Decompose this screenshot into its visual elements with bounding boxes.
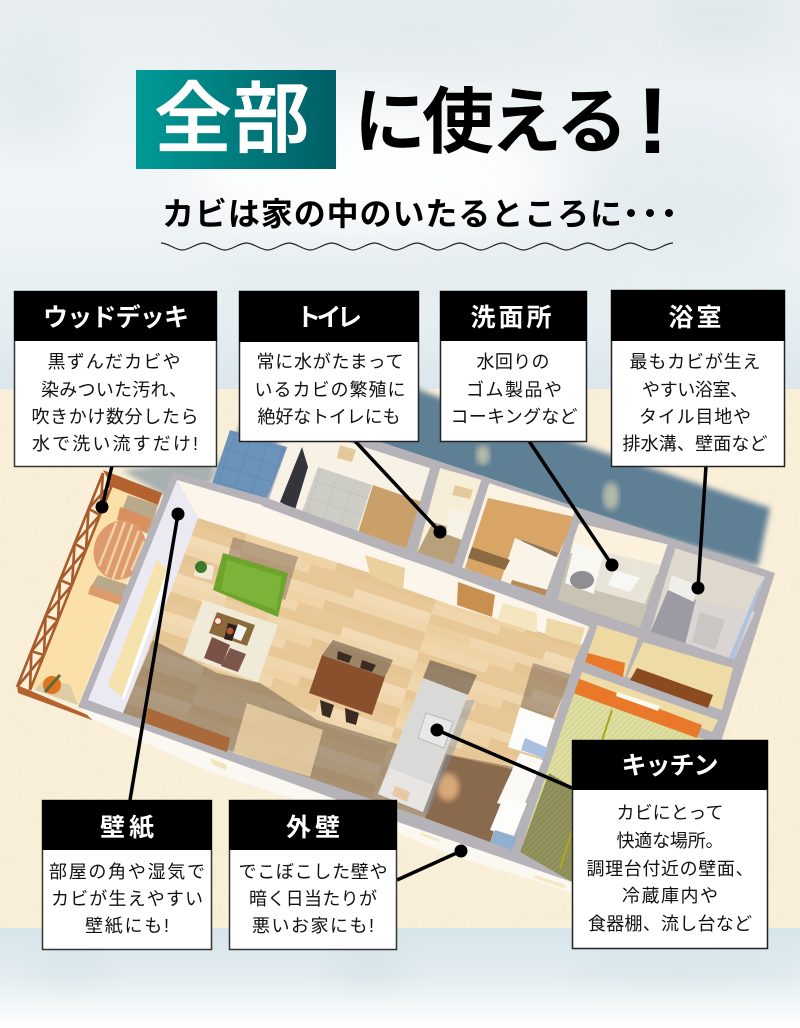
title text bbox=[354, 68, 668, 173]
text: exterior wall: 悪いお家にも! bbox=[252, 916, 374, 936]
small closet bbox=[507, 538, 558, 597]
heading: wood deck: ウッドデッキ bbox=[43, 303, 189, 332]
text: wood deck: 水で洗い流すだけ! bbox=[32, 434, 198, 454]
text: washroom: ゴム製品や bbox=[466, 380, 562, 400]
sun patch bbox=[233, 703, 323, 777]
text: kitchen: 冷蔵庫内や bbox=[622, 886, 718, 906]
potted plant bbox=[43, 675, 61, 694]
kitchen floor bbox=[425, 755, 515, 842]
text: wood deck bbox=[32, 352, 198, 454]
background: sky top bbox=[0, 0, 800, 400]
bathroom bbox=[650, 548, 765, 662]
text: bathroom: 最もカビが生え bbox=[630, 352, 760, 372]
text: toilet bbox=[254, 352, 406, 427]
text: wallpaper: カビが生えやすい bbox=[51, 889, 203, 909]
panel: exterior wall bbox=[229, 800, 397, 950]
text: bathroom: 排水溝、壁面など bbox=[622, 434, 768, 454]
hall bbox=[268, 425, 436, 552]
grey room dividers bbox=[405, 462, 676, 632]
subtitle: カビは家の中のいたるところに bbox=[162, 196, 622, 232]
wood deck bbox=[17, 470, 162, 720]
washroom bbox=[557, 523, 670, 628]
text: kitchen: 食器棚、流し台など bbox=[588, 914, 752, 934]
leader dots bbox=[96, 500, 704, 858]
text: toilet: 絶好なトイレにも bbox=[258, 407, 400, 427]
dark door bbox=[280, 447, 308, 510]
heading: washroom: 洗面所 bbox=[470, 304, 552, 332]
green sofa bbox=[213, 553, 288, 617]
deck rails and lattice bbox=[17, 473, 114, 690]
text: exterior wall: でこぼこした壁や bbox=[238, 862, 388, 882]
title text: に使える bbox=[354, 83, 628, 163]
heading: exterior wall: 外壁 bbox=[286, 814, 340, 842]
panel: wood deck bbox=[14, 291, 217, 466]
stairs room bbox=[458, 483, 575, 597]
heading: toilet: トイレ bbox=[296, 304, 362, 332]
house floor plan illustration bbox=[17, 340, 775, 893]
text: exterior wall: 暗く日当たりが bbox=[249, 889, 377, 909]
grey wall below rear rooms bbox=[262, 498, 735, 668]
wavy underline bbox=[161, 243, 673, 250]
heading: kitchen: キッチン bbox=[622, 752, 718, 780]
exterior wall white bbox=[78, 705, 572, 893]
coffee table bbox=[209, 612, 255, 646]
house cast shadow bbox=[122, 340, 770, 566]
leader lines bbox=[102, 441, 706, 880]
heading: bathroom: 浴室 bbox=[668, 304, 722, 332]
japanese room bbox=[520, 672, 718, 882]
living room white wall bbox=[177, 480, 588, 645]
background: sand ground bbox=[0, 389, 800, 928]
title badge bbox=[136, 70, 336, 169]
exterior vents bbox=[210, 758, 566, 889]
closets bbox=[585, 625, 733, 710]
panel: wallpaper bbox=[42, 800, 212, 950]
background: sky bottom bbox=[0, 928, 800, 1028]
text: wood deck: 染みついた汚れ、 bbox=[41, 380, 187, 400]
title text: ! bbox=[637, 68, 668, 173]
shadow patch right bbox=[520, 663, 573, 718]
text: bathroom: やすい浴室、 bbox=[642, 380, 748, 400]
island shadow bbox=[423, 660, 477, 695]
text: washroom: コーキングなど bbox=[450, 407, 578, 427]
panel: washroom bbox=[440, 291, 587, 442]
plant tray bbox=[194, 561, 214, 580]
text: kitchen: 快適な場所。 bbox=[616, 831, 724, 851]
text: kitchen: カビにとって bbox=[616, 803, 724, 823]
panel: toilet bbox=[239, 291, 419, 442]
grey wall japanese room left bbox=[513, 627, 597, 852]
panel: kitchen bbox=[572, 740, 768, 948]
text: kitchen bbox=[586, 803, 754, 934]
living room floor bbox=[123, 518, 590, 842]
text: wallpaper: 壁紙にも! bbox=[85, 916, 169, 936]
rug bbox=[183, 600, 278, 682]
floor shadow bbox=[123, 640, 513, 842]
text: wood deck: 吹きかけ数分したら bbox=[32, 407, 198, 427]
patio table and chairs bbox=[86, 495, 158, 605]
living room left wall bbox=[88, 480, 198, 713]
kitchen island bbox=[378, 678, 475, 815]
stools bbox=[204, 637, 246, 672]
sink bbox=[594, 552, 660, 604]
text: exterior wall bbox=[238, 862, 388, 936]
text: wallpaper bbox=[49, 862, 205, 936]
toilet room bbox=[417, 468, 482, 565]
kitchen cabinets bbox=[490, 707, 555, 850]
subtitle: ・・・ bbox=[616, 197, 684, 232]
text: wood deck: 黒ずんだカビや bbox=[48, 352, 180, 372]
washing machine bbox=[565, 543, 604, 594]
sideboard bbox=[145, 708, 230, 752]
text: kitchen: 調理台付近の壁面、 bbox=[586, 859, 754, 879]
text: washroom bbox=[450, 352, 578, 427]
panel: bathroom bbox=[611, 290, 785, 466]
grey wall tops bbox=[78, 415, 775, 882]
text: wallpaper: 部屋の角や湿気で bbox=[49, 862, 205, 882]
text: bathroom: タイル目地や bbox=[639, 407, 751, 427]
dining table bbox=[309, 640, 393, 725]
sofa shadow bbox=[222, 537, 298, 600]
heading: wallpaper: 壁紙 bbox=[100, 814, 154, 842]
living room doors bbox=[365, 555, 585, 645]
text: toilet: 常に水がたまって bbox=[256, 352, 404, 372]
blue tile terrace bbox=[212, 430, 290, 502]
title badge: 全部 bbox=[154, 77, 310, 163]
text: washroom: 水回りの bbox=[476, 352, 550, 372]
text: bathroom bbox=[622, 352, 768, 454]
text: toilet: いるカビの繁殖に bbox=[254, 379, 406, 400]
